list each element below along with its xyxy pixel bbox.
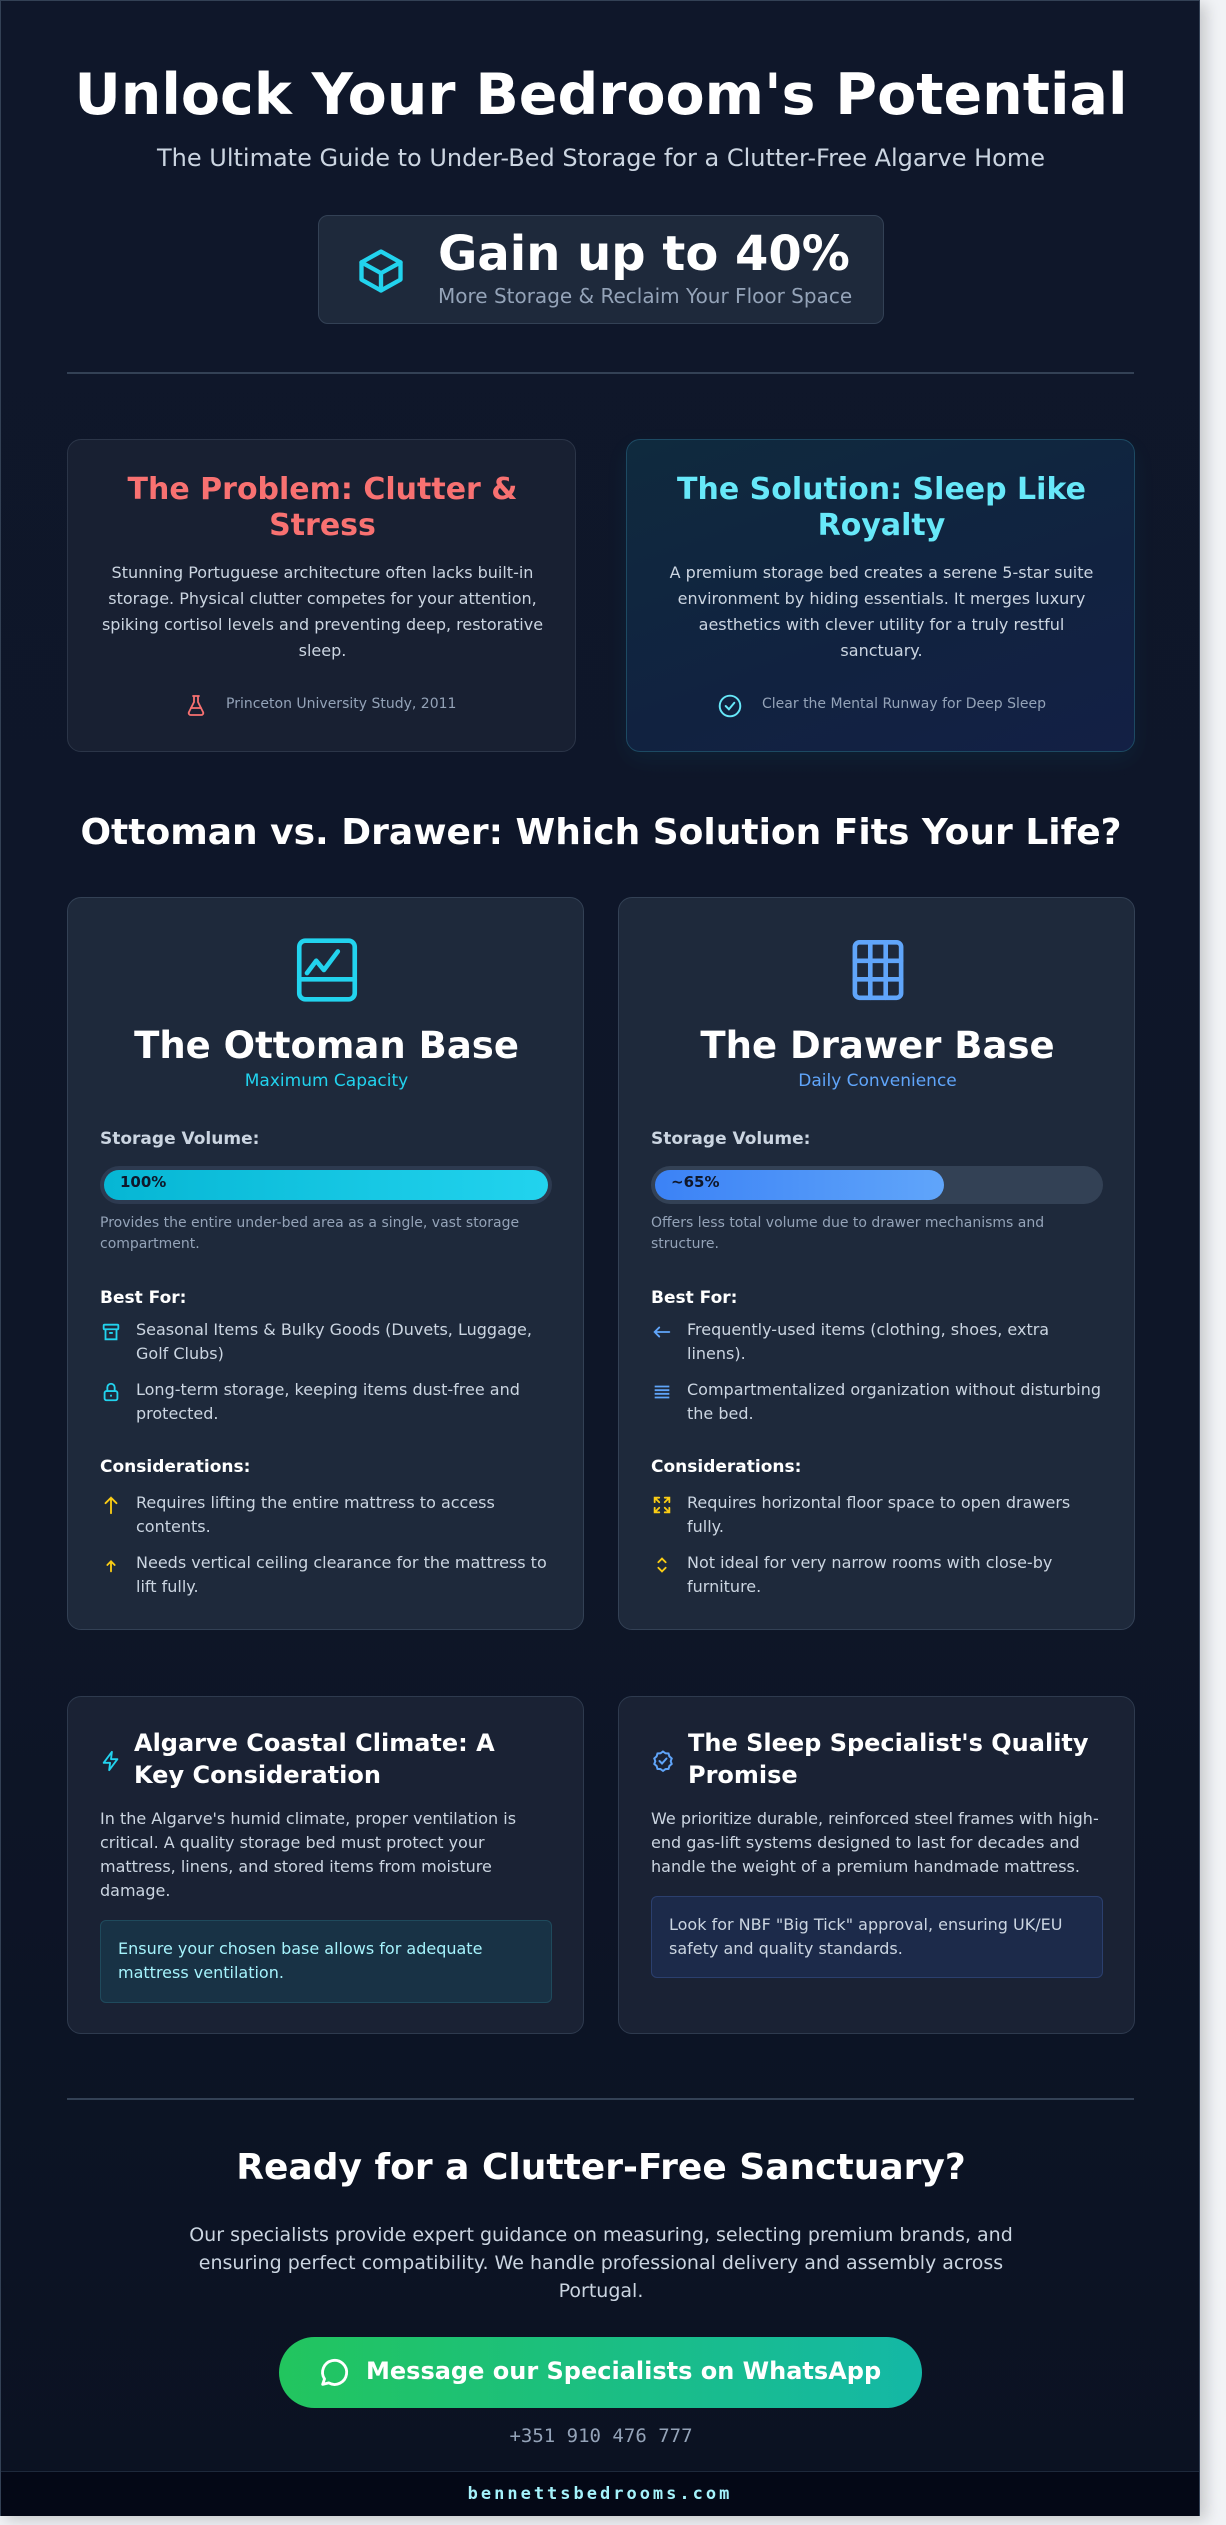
panel: solution [626,439,1135,752]
quality text: We prioritize durable, reinforced steel frames with high-end gas-lift systems designed to last for decades and handle the weight of a premium handmade mattress. [651,1809,1099,1876]
bar description: Provides the entire under-bed area as a single, vast storage compartment. [100,1215,519,1252]
solution note: Clear the Mental Runway for Deep Sleep [762,696,1046,712]
solution text: A premium storage bed creates a serene 5-star suite environment by hiding essentials. It merges luxury aesthetics with clever utility for a truly restful sanctuary. [670,563,1093,660]
icon: badge check [653,1750,673,1772]
CTA text: Our specialists provide expert guidance on measuring, selecting premium brands, and ensuring perfect compatibility. We handle professional delivery and assembly across Portugal. [189,2224,1013,2302]
best for list: Compartmentalized organization without disturbing the bed. [687,1380,1101,1423]
callout: ventilation [100,1920,552,2003]
drawer subtitle: Daily Convenience [798,1071,957,1091]
section heading: Ottoman vs. Drawer: Which Solution Fits Your Life? [80,812,1122,853]
bar chart: 100% [100,1166,552,1204]
button: whatsapp: Message our Specialists on WhatsApp [366,2357,881,2385]
bar chart: 100%: 100% [120,1173,166,1191]
solution note [718,694,1046,718]
bar chart: 65% [651,1166,1103,1204]
best for list: Long-term storage, keeping items dust-free and protected. [136,1380,520,1423]
considerations list: Requires lifting the entire mattress to access contents. [136,1493,495,1536]
considerations list [654,1493,1070,1596]
panel: ottoman [67,897,584,1630]
bar description: Offers less total volume due to drawer mechanisms and structure. [651,1215,1044,1252]
ottoman subtitle: Maximum Capacity [245,1071,408,1091]
stat text [438,226,852,308]
bar chart: 65%: ~65% [671,1173,719,1191]
callout: NBF [651,1896,1103,1978]
best for list: Frequently-used items (clothing, shoes, extra linens). [687,1320,1049,1363]
considerations list [104,1493,547,1596]
drawer title: The Drawer Base [700,1024,1055,1067]
subtitle: The Ultimate Guide to Under-Bed Storage for a Clutter-Free Algarve Home [157,144,1045,172]
panel: drawer [618,897,1135,1630]
footer [1,2471,1199,2516]
problem text: Stunning Portuguese architecture often lacks built-in storage. Physical clutter competes for your attention, spiking cortisol levels and preventing deep, restorative sleep. [102,563,543,660]
panel: quality [618,1696,1135,2034]
phone: +351 910 476 777 [509,2425,693,2447]
best for heading: Best For: [100,1288,186,1308]
best for list: Seasonal Items & Bulky Goods (Duvets, Luggage, Golf Clubs) [136,1320,532,1363]
source note: Princeton University Study, 2011 [226,696,456,712]
storage label: Storage Volume: [100,1129,259,1149]
icon: bolt [102,1750,118,1772]
callout: NBF: Look for NBF "Big Tick" approval, ensuring UK/EU safety and quality standards. [669,1915,1062,1958]
best for list [654,1320,1101,1423]
climate heading: Algarve Coastal Climate: A Key Consideration [134,1729,495,1789]
icon: box [359,249,403,293]
icon: ottoman [296,938,358,1002]
icon: chat [321,2358,348,2386]
best for list [102,1320,532,1423]
solution heading: The Solution: Sleep Like Royalty [677,472,1086,543]
considerations heading: Considerations: [651,1457,801,1477]
footer: bennettsbedrooms.com [468,2484,732,2504]
icon: drawer grid [852,940,904,1000]
considerations list: Requires horizontal floor space to open drawers fully. [687,1493,1070,1536]
considerations list: Needs vertical ceiling clearance for the mattress to lift fully. [136,1553,547,1596]
panel: problem [67,439,576,752]
considerations list: Not ideal for very narrow rooms with close-by furniture. [687,1553,1052,1596]
ottoman title: The Ottoman Base [134,1024,519,1067]
CTA heading: Ready for a Clutter-Free Sanctuary? [236,2147,966,2188]
quality heading: The Sleep Specialist's Quality Promise [688,1729,1089,1789]
source note [188,695,456,716]
considerations heading: Considerations: [100,1457,250,1477]
climate text: In the Algarve's humid climate, proper ventilation is critical. A quality storage bed must protect your mattress, linens, and stored items from moisture damage. [100,1809,516,1900]
stat box [318,215,884,324]
stat text: Gain up to 40% [438,226,850,282]
stat text: More Storage & Reclaim Your Floor Space [438,284,852,308]
callout: ventilation: Ensure your chosen base allows for adequate mattress ventilation. [118,1939,482,1982]
panel: climate [67,1696,584,2034]
button: whatsapp [279,2337,922,2408]
title: Unlock Your Bedroom's Potential [74,62,1128,128]
problem heading: The Problem: Clutter & Stress [128,472,517,543]
storage label: Storage Volume: [651,1129,810,1149]
best for heading: Best For: [651,1288,737,1308]
